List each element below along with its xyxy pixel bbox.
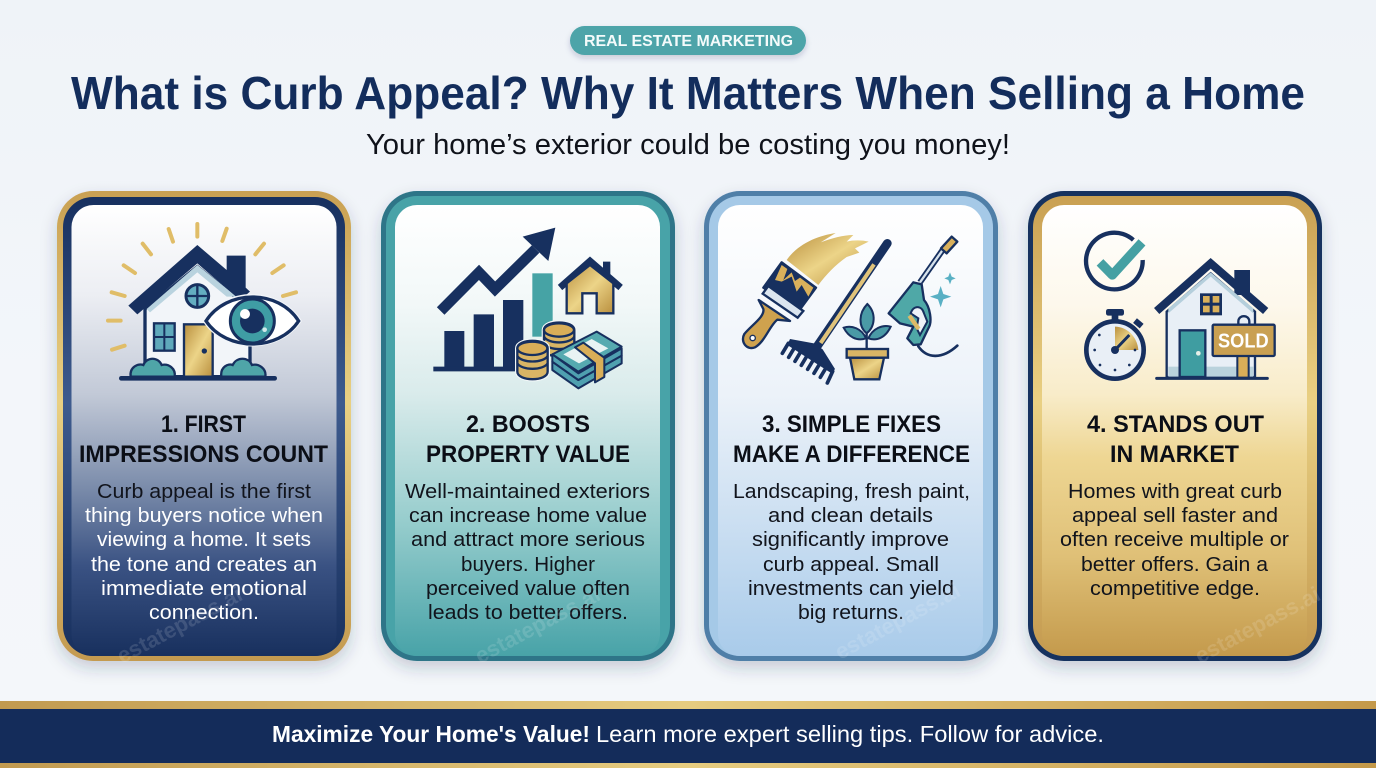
heading: PROPERTY VALUE [426,441,630,468]
watermarks: estatepass.ai [831,577,964,664]
panel: first impressions count [57,191,351,661]
watermarks: estatepass.ai [1191,581,1324,668]
panel: boosts property value [381,191,675,661]
panel: stands out in market [1028,191,1322,661]
heading: IMPRESSIONS COUNT [79,441,328,468]
icon: house with eye [108,224,302,378]
body text: connection. [149,601,259,624]
body text: competitive edge. [1090,577,1260,600]
heading [1087,411,1264,468]
watermarks: estatepass.ai [471,581,604,668]
body text: Well-maintained exteriors [405,480,650,503]
icon: paintbrush, rake, plant and pressure washer [743,233,957,383]
heading [426,411,630,468]
icon: check, stopwatch and sold house: SOLD [1218,330,1269,353]
body text [405,480,650,624]
body text: investments can yield [748,577,954,600]
body text: Landscaping, fresh paint, [733,480,970,503]
body text: perceived value often [426,577,630,600]
heading: 2. BOOSTS [466,411,590,438]
icon: check, stopwatch and sold house [1086,233,1275,379]
footer banner: Learn more expert selling tips. Follow for advice. [596,721,1104,747]
body text [733,480,970,624]
watermarks [113,577,1324,668]
body text: Curb appeal is the first [97,480,311,503]
body text: buyers. Higher [461,553,595,576]
footer banner: Maximize Your Home's Value! [272,721,590,747]
body text: Homes with great curb [1068,480,1282,503]
heading [79,411,328,468]
heading: 4. STANDS OUT [1087,411,1264,438]
body text: significantly improve [752,528,949,551]
body text [85,480,323,624]
heading: IN MARKET [1110,441,1239,468]
heading [733,411,970,468]
body text: and attract more serious [411,528,645,551]
body text: big returns. [798,601,904,624]
body text: immediate emotional [101,577,307,600]
body text: the tone and creates an [91,553,317,576]
heading: 3. SIMPLE FIXES [762,411,941,438]
panel: simple fixes make a difference [704,191,998,661]
body text: often receive multiple or [1060,528,1289,551]
body text: and clean details [768,504,933,527]
badge: real estate marketing: REAL ESTATE MARKETING [584,33,793,50]
body text: better offers. Gain a [1081,553,1269,576]
body text: viewing a home. It sets [97,528,311,551]
heading: 1. FIRST [161,411,246,438]
body text: appeal sell faster and [1072,504,1278,527]
icon: chart, coins and money [433,228,622,388]
watermarks: estatepass.ai [113,581,246,668]
body text: can increase home value [409,504,647,527]
body text [1060,480,1289,600]
footer banner [0,701,1376,768]
title: What is Curb Appeal? Why It Matters When Selling a Home [71,67,1305,119]
body text: thing buyers notice when [85,504,323,527]
badge: real estate marketing [570,26,806,55]
body text: leads to better offers. [428,601,628,624]
heading: MAKE A DIFFERENCE [733,441,970,468]
body text: curb appeal. Small [763,553,939,576]
subtitle: Your home’s exterior could be costing you money! [366,129,1010,161]
